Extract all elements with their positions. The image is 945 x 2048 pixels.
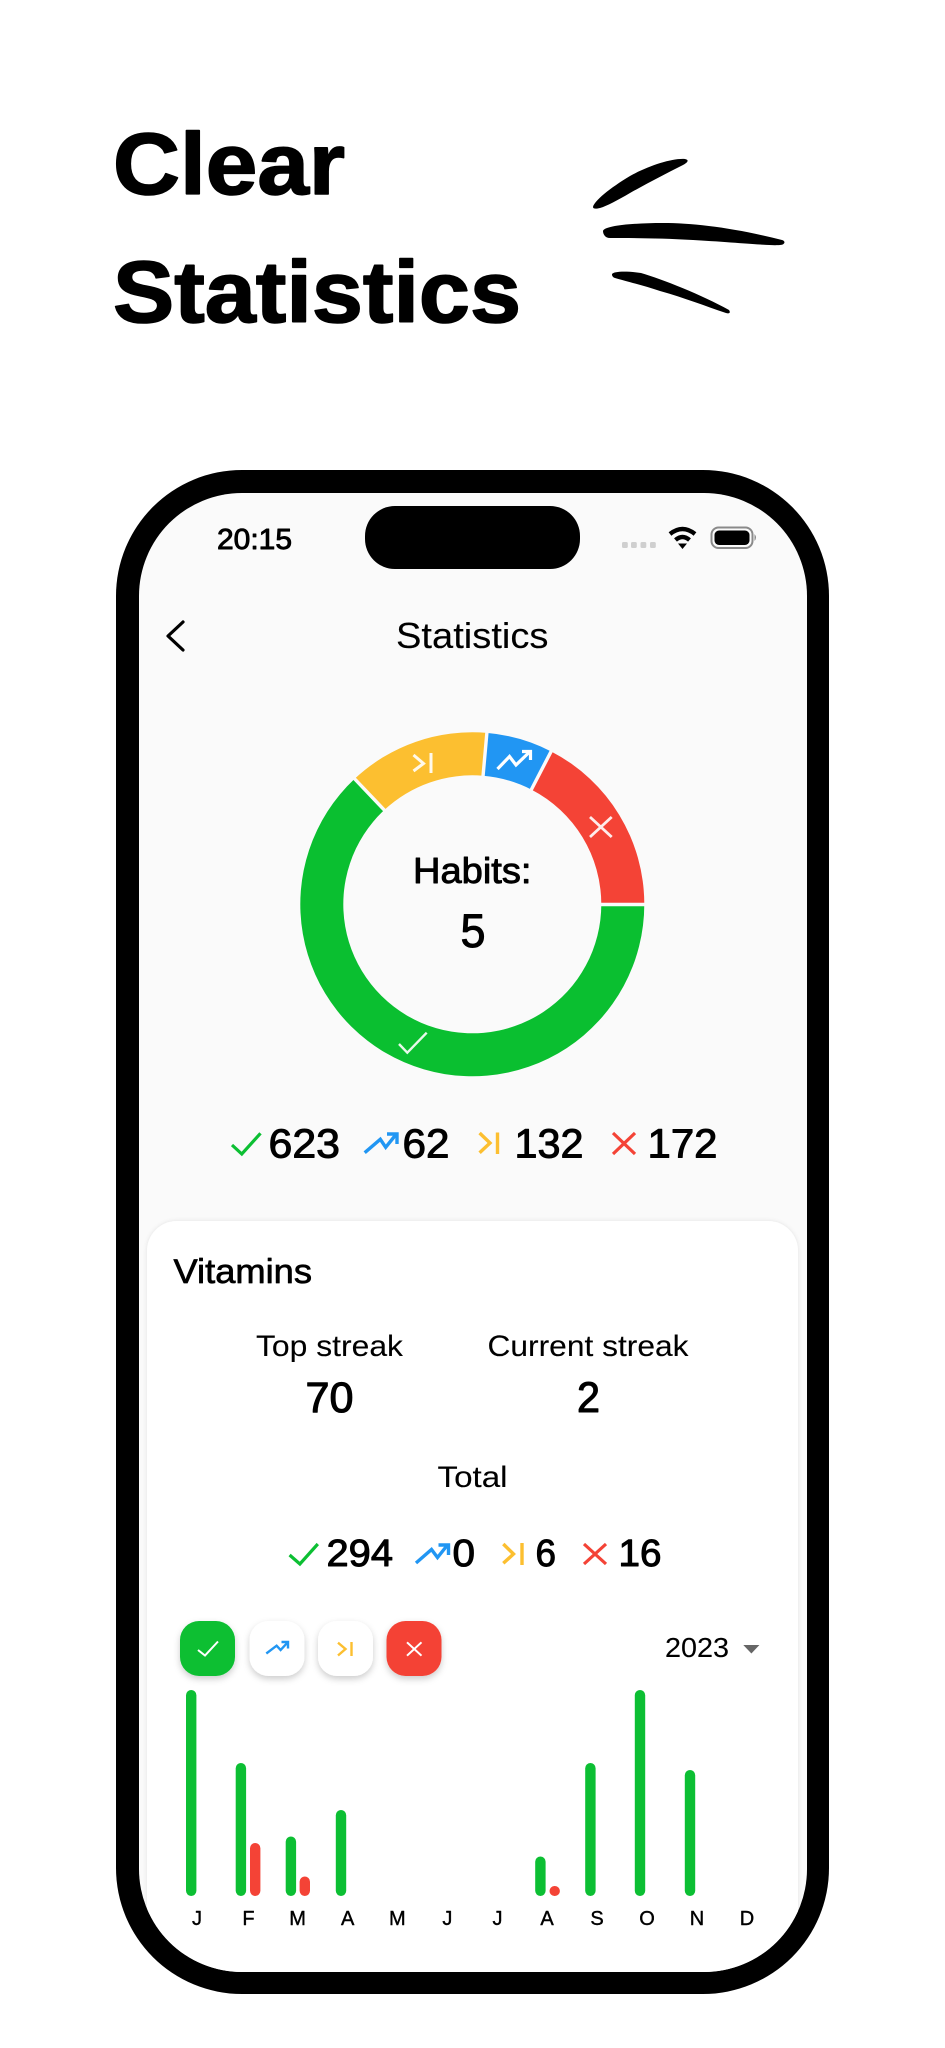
icon: cross xyxy=(584,1544,606,1564)
total label: Total xyxy=(438,1461,508,1494)
title: Statistics xyxy=(113,244,521,341)
status time: 20:15 xyxy=(217,524,292,556)
icon: wifi xyxy=(670,529,695,549)
panel: habit card xyxy=(147,1221,798,2021)
habit totals row: 16 xyxy=(618,1533,662,1575)
overall totals row: 62 xyxy=(402,1120,450,1166)
habit totals row: 0 xyxy=(452,1533,475,1575)
icon: donut trend xyxy=(498,752,530,769)
year selector xyxy=(666,1638,760,1658)
year selector: 2023 xyxy=(665,1632,729,1663)
filter button: trend xyxy=(250,1621,304,1676)
donut center value: 5 xyxy=(460,904,486,957)
habit totals row xyxy=(288,1539,660,1567)
icon: donut cross xyxy=(590,817,612,837)
habit totals row: 294 xyxy=(326,1533,393,1575)
overall totals row xyxy=(231,1128,716,1158)
month labels: A xyxy=(540,1908,554,1930)
filter button: failed xyxy=(386,1621,442,1676)
icon: cross xyxy=(613,1133,635,1154)
top streak value: 70 xyxy=(306,1374,354,1422)
month labels xyxy=(192,1910,754,1926)
segment: failed xyxy=(532,752,644,904)
donut chart xyxy=(300,726,650,1076)
overall totals row: 132 xyxy=(514,1120,584,1166)
donut center label: Habits: xyxy=(413,850,532,891)
current streak label: Current streak xyxy=(488,1330,690,1363)
icon: check xyxy=(232,1133,260,1154)
month labels: F xyxy=(242,1908,255,1930)
icon: battery xyxy=(712,528,756,548)
back chevron xyxy=(168,622,183,650)
top streak label: Top streak xyxy=(256,1330,404,1363)
month labels: N xyxy=(690,1908,704,1930)
current streak value: 2 xyxy=(577,1374,600,1422)
icon: skip xyxy=(480,1132,498,1154)
month labels: D xyxy=(740,1908,754,1930)
month labels: J xyxy=(192,1908,202,1930)
signal dots xyxy=(622,542,656,548)
title xyxy=(113,116,521,341)
filter button: skip xyxy=(318,1621,373,1676)
month labels: O xyxy=(639,1908,655,1930)
filter button: done xyxy=(180,1621,235,1676)
icon: hand-drawn accent strokes xyxy=(593,159,784,313)
month labels: M xyxy=(289,1908,306,1930)
icon: skip xyxy=(503,1543,522,1565)
bar chart: monthly results xyxy=(186,1690,695,1896)
icon: donut check xyxy=(399,1033,427,1053)
icon: donut skip xyxy=(414,753,431,773)
icon: trend xyxy=(365,1134,397,1153)
segment: trend xyxy=(483,733,551,790)
month labels: A xyxy=(341,1908,355,1930)
overall totals row: 172 xyxy=(648,1120,718,1166)
icon: trend xyxy=(416,1545,448,1563)
month labels: J xyxy=(492,1908,502,1930)
phone screen xyxy=(139,493,807,2021)
habit totals row: 6 xyxy=(536,1533,556,1575)
title: Clear xyxy=(113,116,345,213)
month labels: J xyxy=(442,1908,452,1930)
segment: skipped xyxy=(355,732,487,810)
dynamic island xyxy=(365,506,580,569)
screen title: Statistics xyxy=(396,615,548,656)
overall totals row: 623 xyxy=(268,1120,340,1166)
icon: check xyxy=(290,1544,318,1564)
card heading: Vitamins: Vitamins xyxy=(174,1253,312,1291)
month labels: M xyxy=(389,1908,406,1930)
phone frame xyxy=(116,470,829,1994)
month labels: S xyxy=(590,1908,604,1930)
segment: done xyxy=(300,779,644,1076)
